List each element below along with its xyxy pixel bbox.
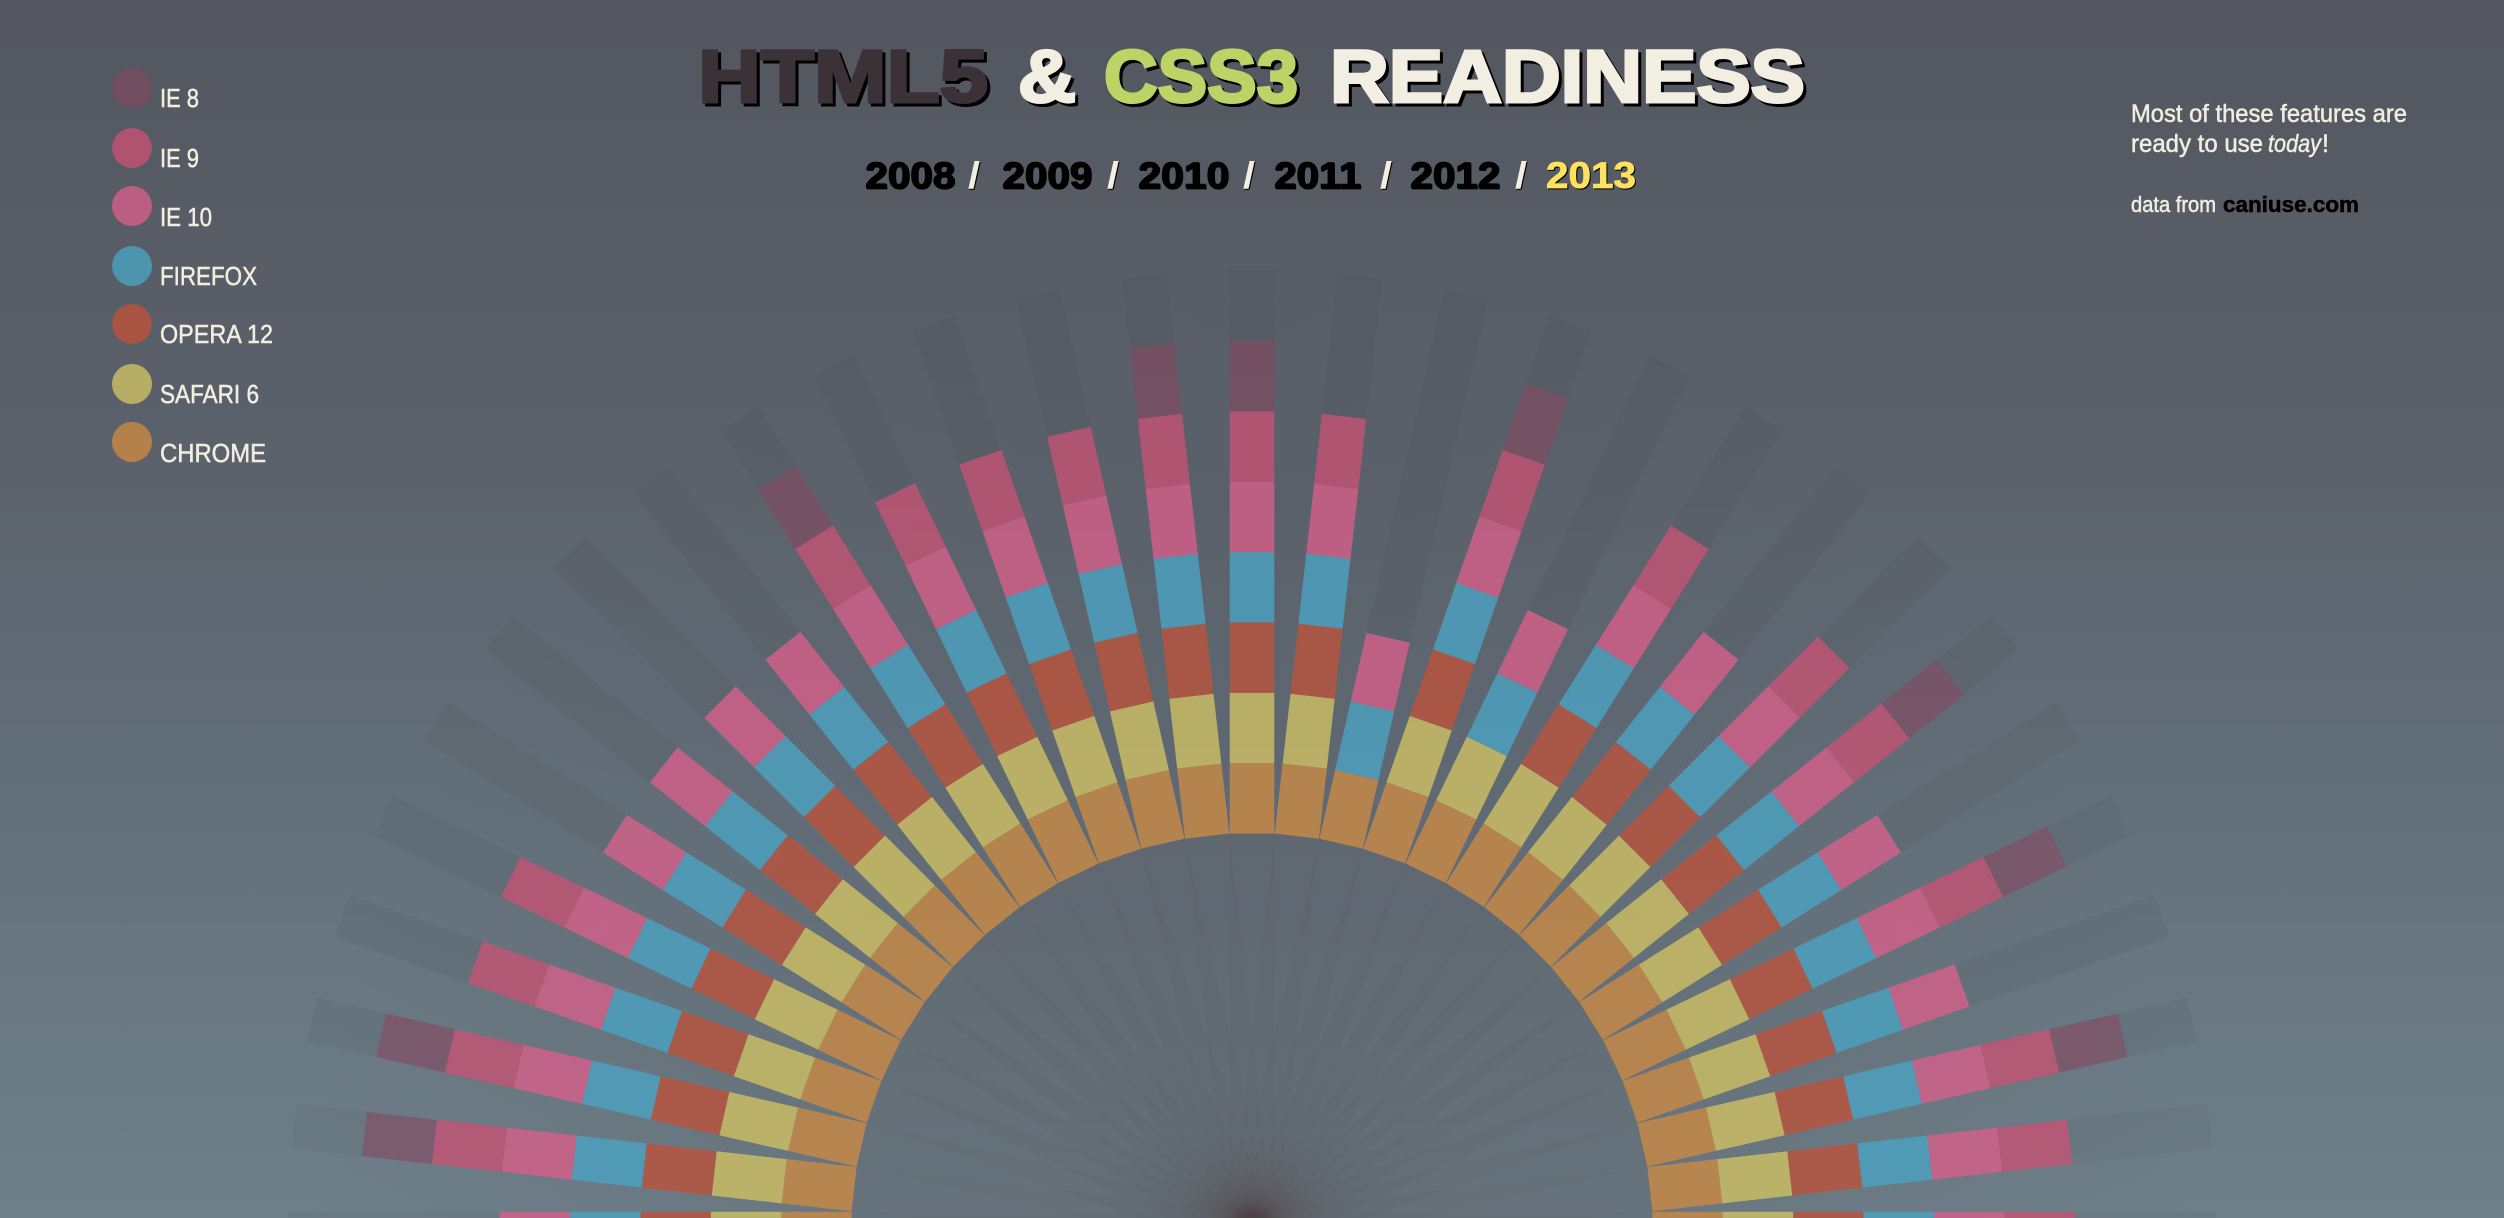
spoke -1: [1122, 274, 1273, 1218]
data source: [2131, 192, 2359, 217]
data source: data from: [2131, 192, 2216, 217]
spoke -3: [913, 317, 1270, 1218]
year timeline: 2008: [865, 155, 955, 196]
spoke 4: [1235, 356, 1690, 1218]
year timeline: 2009: [1002, 155, 1092, 196]
spoke -2: [1016, 289, 1271, 1218]
spoke 9: [1240, 702, 2080, 1218]
spoke -11: [335, 895, 1259, 1218]
spoke -9: [424, 702, 1264, 1218]
spoke -5: [720, 406, 1268, 1218]
note text: [2131, 100, 2407, 158]
legend item: IE 8: IE 8: [160, 83, 199, 113]
spoke 10: [1242, 796, 2130, 1218]
spoke -8: [484, 616, 1266, 1218]
legend item: Opera 12: OPERA 12: [160, 319, 273, 349]
note text: ready to use: [2131, 130, 2263, 158]
note text: !: [2322, 130, 2329, 158]
spoke 5: [1236, 406, 1784, 1218]
spoke 6: [1236, 466, 1870, 1218]
year timeline: /: [968, 155, 980, 196]
title: READINESS: [1330, 35, 1805, 118]
legend item: Safari 6: SAFARI 6: [160, 379, 259, 409]
note text: Most of these features are: [2131, 100, 2407, 128]
spoke -12: [307, 998, 1257, 1218]
spokes: [288, 270, 2216, 1218]
year timeline: 2011: [1274, 155, 1361, 196]
spoke 2: [1233, 289, 1488, 1218]
legend item: IE 10: IE 10: [160, 202, 212, 232]
spoke 7: [1237, 537, 1949, 1218]
legend item: IE 10: [112, 186, 212, 232]
spoke 1: [1231, 274, 1382, 1218]
spoke -10: [374, 796, 1262, 1218]
spoke 0: [1230, 270, 1274, 1218]
year timeline: 2012: [1410, 155, 1500, 196]
legend item: IE 8: [112, 68, 199, 113]
legend item: IE 9: [112, 128, 199, 173]
year timeline: 2010: [1138, 155, 1229, 196]
spoke 14: [1252, 1212, 2216, 1218]
legend item: Opera 12: [112, 304, 273, 349]
spoke -14: [288, 1212, 1252, 1218]
legend: [112, 68, 273, 468]
legend item: Chrome: CHROME: [160, 438, 266, 468]
note text: today: [2268, 130, 2322, 158]
year timeline: /: [1243, 155, 1255, 196]
spoke -6: [634, 466, 1268, 1218]
legend item: Safari 6: [112, 364, 259, 409]
title: CSS3: [1104, 35, 1298, 118]
title: HTML5: [698, 35, 988, 118]
spoke 13: [1250, 1104, 2212, 1218]
spoke 12: [1247, 998, 2197, 1218]
spoke 11: [1245, 895, 2169, 1218]
legend item: Firefox: FIREFOX: [160, 261, 257, 291]
legend item: Chrome: [112, 422, 266, 468]
title: &: [1018, 35, 1076, 118]
year timeline: [865, 155, 1636, 196]
legend item: IE 9: IE 9: [160, 143, 199, 173]
year timeline: /: [1107, 155, 1119, 196]
title: [698, 35, 1805, 118]
legend item: Firefox: [112, 246, 257, 291]
year timeline: 2013: [1546, 155, 1636, 196]
data source: caniuse.com: [2223, 192, 2359, 217]
spoke 8: [1238, 616, 2020, 1218]
spoke 3: [1234, 317, 1591, 1218]
spoke -4: [814, 356, 1269, 1218]
spoke -13: [292, 1104, 1254, 1218]
year timeline: /: [1380, 155, 1392, 196]
year timeline: /: [1515, 155, 1527, 196]
spoke -7: [555, 537, 1267, 1218]
